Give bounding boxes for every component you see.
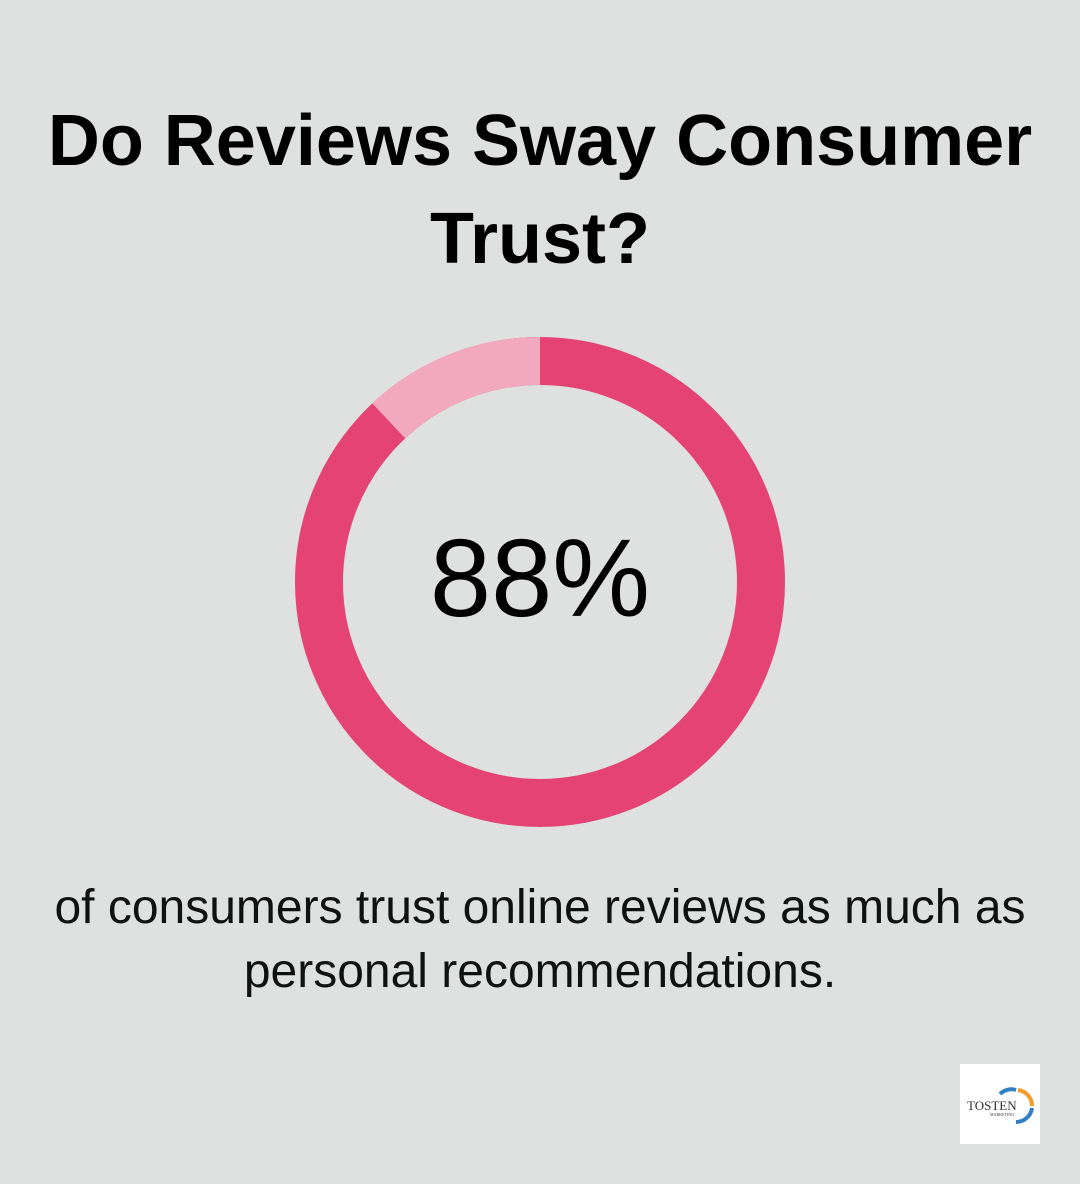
description text <box>54 881 1026 998</box>
logo: TOSTEN <box>967 1098 1017 1113</box>
logo: MARKETING <box>990 1112 1014 1117</box>
title: Do Reviews Sway Consumer <box>48 101 1032 181</box>
description text: of consumers trust online reviews as much as <box>54 881 1026 934</box>
donut chart: 88% <box>430 517 650 640</box>
title: Trust? <box>430 199 650 279</box>
description text: personal recommendations. <box>244 945 836 998</box>
logo <box>960 1064 1040 1144</box>
title <box>48 101 1032 279</box>
